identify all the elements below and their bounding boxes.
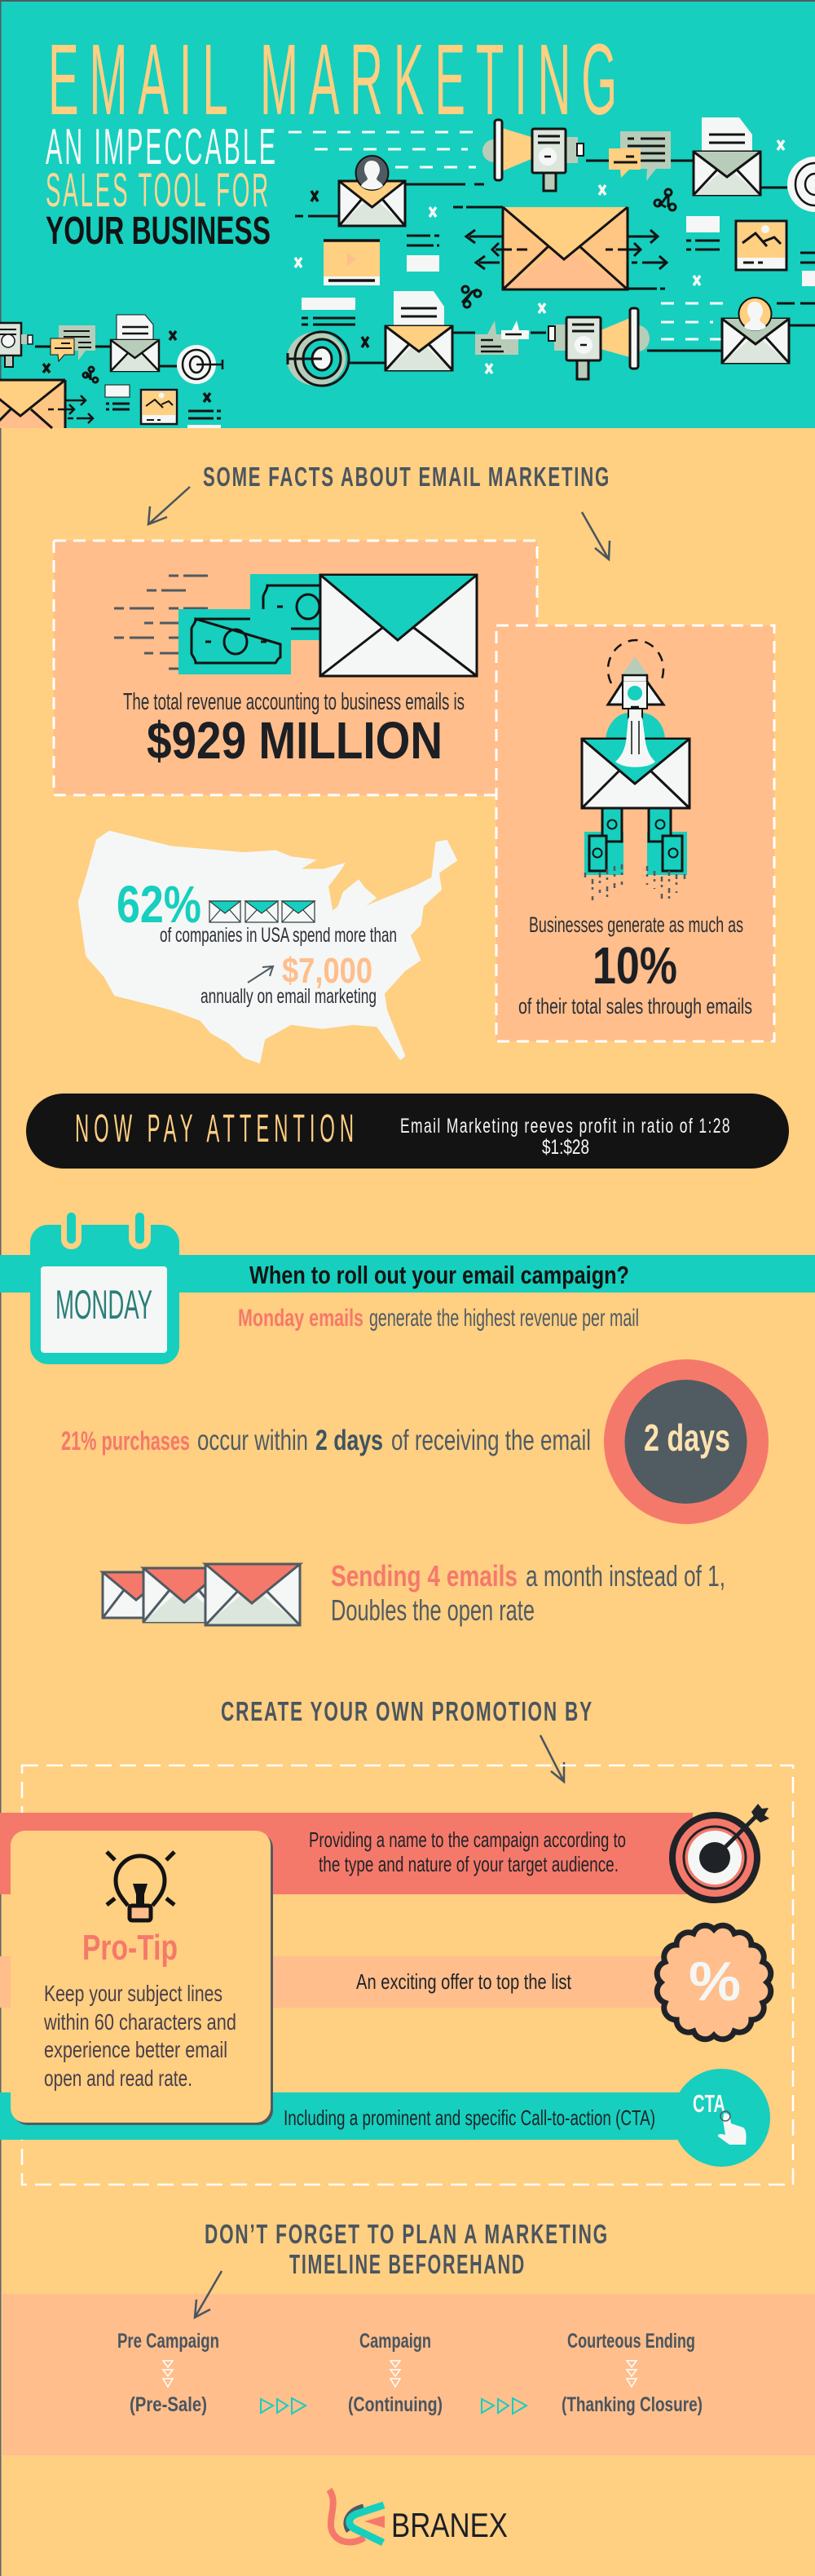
speed lines bbox=[114, 576, 208, 669]
band: offer bbox=[0, 1956, 676, 2008]
text: purchases: 2 days bbox=[315, 1425, 383, 1456]
icon: target bbox=[672, 1804, 769, 1900]
panel: timeline bbox=[2, 2271, 815, 2455]
stage: pre campaign: (Pre-Sale) bbox=[130, 2393, 207, 2416]
stage: campaign bbox=[348, 2330, 443, 2416]
arrow: to sales panel bbox=[582, 512, 610, 559]
text: exciting offer: An exciting offer to top the list bbox=[356, 1969, 572, 1994]
pro tip text bbox=[43, 1981, 236, 2091]
icon: envelope with document bbox=[694, 117, 760, 195]
pro tip text: within 60 characters and bbox=[43, 2009, 236, 2035]
left cluster: envelope with document bbox=[111, 315, 159, 371]
map text 2: annually on email marketing bbox=[200, 985, 377, 1008]
left cluster: arrows bbox=[48, 395, 93, 423]
small envelopes bbox=[209, 901, 315, 922]
text: sending 4 emails: a month instead of 1, bbox=[526, 1559, 725, 1593]
icon: percent badge bbox=[657, 1925, 771, 2039]
icon: 2 days circle: 2 days bbox=[644, 1416, 730, 1459]
left cluster: target bbox=[177, 345, 222, 384]
icon: calendar bbox=[30, 1213, 179, 1364]
connector lines bbox=[35, 161, 815, 366]
sales figure: 10% bbox=[593, 936, 677, 995]
heading: promotion: CREATE YOUR OWN PROMOTION BY bbox=[221, 1696, 593, 1726]
stage: courteous ending: (Thanking Closure) bbox=[562, 2393, 703, 2416]
arrow: to revenue panel bbox=[148, 487, 190, 524]
stage: pre campaign bbox=[117, 2330, 219, 2416]
heading: timeline bbox=[205, 2219, 609, 2279]
map shape bbox=[78, 831, 457, 1063]
icon: target lower bbox=[287, 332, 349, 386]
pro tip text: experience better email bbox=[44, 2037, 227, 2062]
left cluster: chat bubbles bbox=[51, 325, 95, 361]
text: monday emails: generate the highest revenue per mail bbox=[369, 1305, 639, 1332]
text: purchases: occur within bbox=[197, 1425, 308, 1456]
icon: CTA button: CTA bbox=[693, 2089, 725, 2118]
icon: megaphone lower bbox=[548, 308, 650, 379]
arrows around large envelope bbox=[466, 230, 667, 269]
panel: now pay attention pill bbox=[26, 1094, 789, 1169]
text: purchases: of receiving the email bbox=[391, 1425, 591, 1456]
icon: money bills bbox=[178, 574, 363, 674]
heading: timeline: TIMELINE BEFOREHAND bbox=[289, 2249, 526, 2279]
heading: facts: SOME FACTS ABOUT EMAIL MARKETING bbox=[203, 462, 610, 492]
panel: timing band bbox=[0, 1255, 815, 1292]
left cluster: megaphone bbox=[0, 323, 33, 367]
icon: envelope with person lower bbox=[722, 298, 789, 363]
stage: pre campaign: Pre Campaign bbox=[117, 2330, 219, 2353]
panel: now pay attention pill: NOW PAY ATTENTION bbox=[75, 1107, 359, 1151]
heading: when to roll out: When to roll out your email campaign? bbox=[249, 1261, 629, 1289]
left cluster: large envelope bbox=[0, 380, 65, 428]
icon: chat bubbles lower bbox=[475, 320, 529, 355]
icon: chat bubbles top bbox=[609, 131, 671, 181]
pill text line 2: $1:$28 bbox=[542, 1136, 589, 1159]
icon: envelope with person bbox=[339, 156, 405, 226]
text: purchases bbox=[61, 1425, 591, 1456]
stage: courteous ending bbox=[562, 2330, 703, 2416]
revenue text: The total revenue accounting to business emails is bbox=[123, 689, 465, 715]
icon: target right bbox=[787, 157, 815, 212]
stage: campaign: Campaign bbox=[359, 2330, 431, 2353]
heading: timeline: DON’T FORGET TO PLAN A MARKETING bbox=[205, 2219, 609, 2249]
arrow: to promotion panel bbox=[540, 1735, 564, 1782]
arrow: to timeline bbox=[195, 2271, 222, 2318]
icon: light bulb bbox=[107, 1852, 174, 1920]
panel: header: SALES TOOL FOR bbox=[46, 164, 271, 217]
text: monday emails bbox=[238, 1305, 639, 1332]
logo: Branex bbox=[329, 2490, 508, 2544]
icon: percent badge: % bbox=[689, 1951, 741, 2013]
panel: sales share bbox=[496, 625, 774, 1041]
panel: header bbox=[0, 0, 815, 428]
icon: rocket envelope bbox=[582, 640, 689, 900]
text: sending 4 emails bbox=[331, 1559, 725, 1627]
text: monday emails: Monday emails bbox=[238, 1305, 363, 1332]
icon: CTA button bbox=[672, 2069, 770, 2167]
icon: video card bbox=[324, 241, 380, 285]
icon: picture card bbox=[141, 221, 786, 424]
band: cta bbox=[0, 2092, 693, 2140]
icon: 2 days circle bbox=[604, 1359, 769, 1524]
text: purchases: 21% purchases bbox=[61, 1426, 190, 1456]
text: sending 4 emails: Doubles the open rate bbox=[331, 1593, 535, 1627]
logo mark bbox=[329, 2490, 385, 2543]
band: name bbox=[0, 1813, 693, 1894]
panel: promotion bbox=[0, 1765, 793, 2185]
panel: USA map bbox=[78, 831, 457, 1063]
stage arrows 2 bbox=[482, 2398, 526, 2414]
stage: campaign: (Continuing) bbox=[348, 2393, 443, 2416]
icon: large envelope bbox=[503, 207, 628, 289]
panel: revenue bbox=[54, 541, 537, 795]
map figure 62%: 62% bbox=[117, 875, 201, 934]
revenue figure: $929 MILLION bbox=[147, 711, 443, 770]
text: name campaign: Providing a name to the campaign according to bbox=[309, 1827, 626, 1852]
text: name campaign: the type and nature of your target audience. bbox=[319, 1852, 619, 1876]
icon: megaphone top bbox=[482, 120, 584, 191]
dashed signal lines bbox=[289, 132, 724, 339]
calendar day: MONDAY bbox=[55, 1282, 152, 1328]
icon: share nodes bbox=[83, 189, 676, 382]
pro tip text: Keep your subject lines bbox=[44, 1981, 222, 2006]
text: sending 4 emails: Sending 4 emails bbox=[331, 1559, 518, 1593]
arrow to amount bbox=[248, 966, 273, 983]
icon: envelope bbox=[320, 575, 477, 676]
pro tip heading: Pro-Tip bbox=[82, 1928, 178, 1968]
map text 1: of companies in USA spend more than bbox=[160, 924, 397, 947]
pro tip text: open and read rate. bbox=[44, 2066, 192, 2091]
panel: header: AN IMPECCABLE bbox=[46, 119, 278, 175]
text: call to action: Including a prominent and specific Call-to-action (CTA) bbox=[284, 2105, 655, 2130]
logo wordmark: BRANEX bbox=[391, 2506, 508, 2544]
icon: three envelopes bbox=[103, 1564, 300, 1625]
decorative x marks bbox=[43, 140, 784, 402]
text: name campaign bbox=[309, 1827, 626, 1876]
text placeholder blocks bbox=[105, 216, 815, 428]
stage arrows 1 bbox=[261, 2398, 306, 2414]
subtitle line 3: YOUR BUSINESS bbox=[46, 210, 271, 253]
map figure $7,000: $7,000 bbox=[282, 951, 372, 991]
card: pro tip bbox=[11, 1831, 273, 2125]
stage: courteous ending: Courteous Ending bbox=[567, 2330, 695, 2353]
icon: envelope with document lower bbox=[385, 291, 452, 370]
